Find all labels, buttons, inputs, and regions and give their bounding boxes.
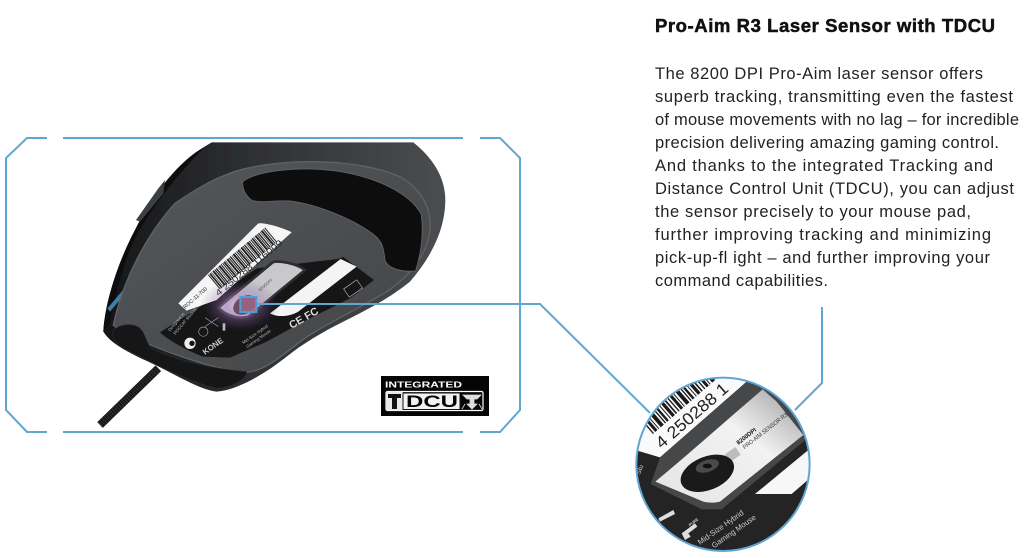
magnified sensor lens: 4 250288 1 bbox=[652, 379, 732, 452]
cable bbox=[100, 368, 158, 425]
barcode label bbox=[638, 378, 746, 458]
description text: further improving tracking and minimizing bbox=[655, 226, 991, 244]
label markings bbox=[658, 510, 675, 522]
black label bbox=[160, 257, 374, 358]
label markings: ROCCAT Studios bbox=[172, 307, 198, 336]
TDCU badge bbox=[381, 376, 489, 416]
label markings: Mid-Size Hybrid bbox=[241, 323, 269, 345]
mouse underside photo: 8200DPI bbox=[257, 278, 273, 292]
label markings: Designed in bbox=[167, 311, 186, 332]
barcode label bbox=[178, 223, 292, 311]
white strip bbox=[270, 259, 357, 316]
magnified sensor lens: PURE bbox=[688, 516, 700, 527]
sensor plate bbox=[655, 389, 803, 503]
barcode label: 4 250288 116009 bbox=[213, 238, 285, 298]
description text: of mouse movements with no lag – for incredible bbox=[655, 111, 1019, 129]
white strip bbox=[755, 450, 809, 494]
label markings bbox=[167, 280, 362, 357]
label markings: Gaming Mouse bbox=[245, 328, 272, 349]
sensor highlight square bbox=[240, 297, 256, 312]
TDCU badge: INTEGRATED bbox=[385, 380, 462, 390]
label markings: KONE bbox=[201, 336, 226, 357]
sensor plate bbox=[218, 262, 305, 317]
description text: command capabilities. bbox=[655, 272, 828, 290]
side button bbox=[136, 180, 165, 222]
mouse body bbox=[103, 142, 445, 392]
label markings: CE FC bbox=[287, 305, 321, 332]
sensor plate frame bbox=[651, 380, 812, 509]
magnified sensor lens: Gaming Mouse bbox=[710, 513, 758, 550]
description text: And thanks to the integrated Tracking and bbox=[655, 157, 993, 175]
TDCU badge: DCU bbox=[406, 392, 458, 411]
sensor glow bbox=[200, 279, 280, 332]
sensor lens hole bbox=[680, 454, 734, 492]
sole plate bbox=[113, 162, 430, 372]
description text: pick-up-fl ight – and further improving your bbox=[655, 249, 990, 267]
side gloss with logo bbox=[103, 147, 205, 332]
top glide foot bbox=[243, 169, 422, 271]
mouse underside photo bbox=[100, 142, 445, 425]
description text: precision delivering amazing gaming control. bbox=[655, 134, 999, 152]
description text: Distance Control Unit (TDCU), you can adjust bbox=[655, 180, 1014, 198]
description text: the sensor precisely to your mouse pad, bbox=[655, 203, 971, 221]
description text: superb tracking, transmitting even the fastest bbox=[655, 88, 1013, 106]
magnified sensor lens: Stu bbox=[635, 464, 645, 476]
sensor text: 8200DPI bbox=[736, 427, 758, 447]
magnified sensor lens bbox=[635, 376, 811, 552]
heading: Pro-Aim R3 Laser Sensor with TDCU bbox=[655, 15, 995, 36]
barcode label: ROC-11-700 bbox=[182, 286, 209, 310]
frame around mouse bbox=[6, 138, 520, 432]
magnified sensor lens: PRO-AIM SENSOR R3 bbox=[742, 412, 790, 451]
icon: tracking arrows bbox=[462, 395, 482, 409]
description text: The 8200 DPI Pro-Aim laser sensor offers bbox=[655, 65, 983, 83]
magnified sensor lens: Mid-Size Hybrid bbox=[696, 508, 745, 547]
description text bbox=[655, 65, 1019, 290]
bottom glide foot bbox=[113, 325, 247, 388]
connector lines bbox=[257, 304, 822, 413]
